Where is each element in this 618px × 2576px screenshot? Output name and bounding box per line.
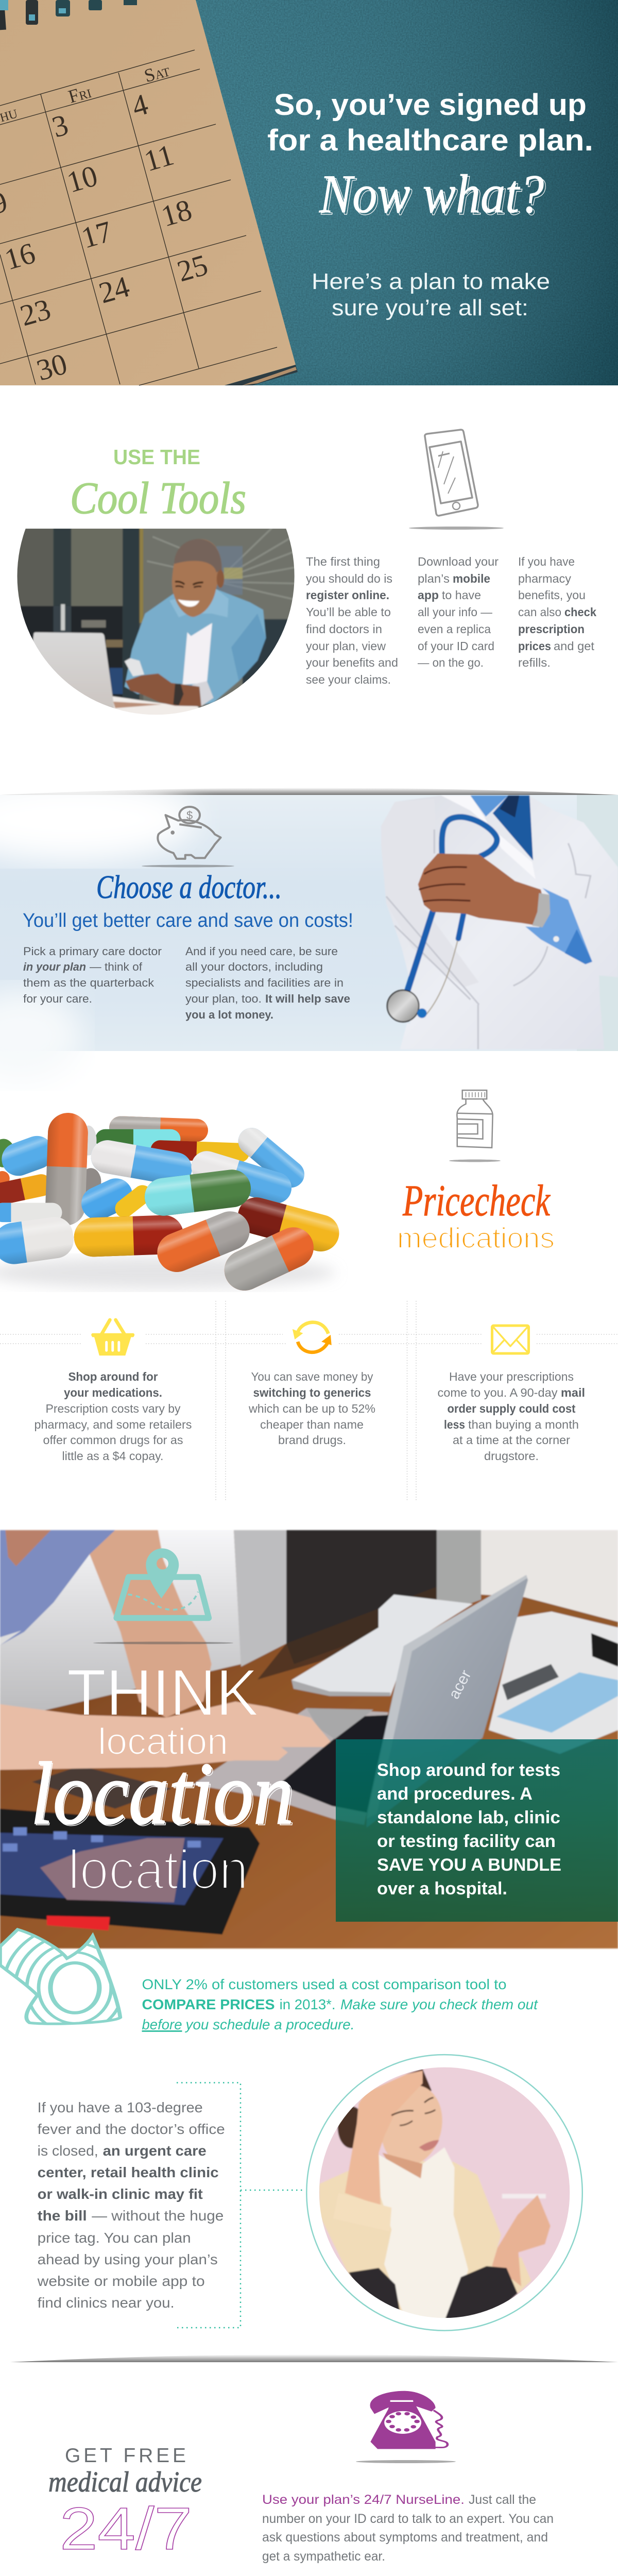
text: mobile app: Download your <box>418 555 499 568</box>
calendar photo: 23 <box>16 292 54 332</box>
headline: So, you’ve signed up <box>274 88 587 122</box>
text: mobile app <box>418 555 499 669</box>
text: register online: your benefits and <box>306 656 398 669</box>
headline <box>267 88 593 157</box>
text: pharmacy benefits: can also <box>518 605 561 619</box>
text: mobile app: app <box>418 588 439 602</box>
photo: sick woman with thermometer <box>304 2050 589 2335</box>
text: primary care doctor: — think of <box>90 960 143 973</box>
text: shop around: Prescription costs vary by <box>45 1402 181 1415</box>
text: mobile app: plan’s <box>418 572 450 585</box>
calendar photo: 18 <box>158 193 195 233</box>
heading: location script: location <box>31 1745 294 1843</box>
text: urgent care: an urgent care <box>103 2143 207 2159</box>
text: doctors in plan: It will help save <box>265 992 350 1005</box>
text: mail order supply: mail <box>561 1386 585 1399</box>
icon: medicine bottle <box>457 1090 493 1148</box>
calendar photo: 25 <box>174 248 211 288</box>
icon: piggy bank <box>158 807 221 859</box>
text: urgent care: center, retail health clinic <box>38 2164 219 2180</box>
dotted bracket <box>177 2082 303 2328</box>
heading: location first: location <box>98 1721 228 1762</box>
text: shop around: offer common drugs for as <box>43 1433 183 1447</box>
calendar photo: 17 <box>78 214 115 255</box>
text: mobile app: to have <box>442 588 481 602</box>
text: urgent care <box>37 2099 225 2311</box>
acer wordmark: acer <box>445 1667 475 1702</box>
icon: rotary telephone <box>370 2391 448 2449</box>
icon: envelope <box>492 1326 528 1353</box>
photo: man with laptop and phone <box>17 529 295 715</box>
icon shadow <box>409 527 504 530</box>
text: nurseline: Use your plan’s 24/7 NurseLine. <box>262 2493 465 2507</box>
script heading: choose a doctor: Choose a doctor... <box>96 869 282 905</box>
dollar sign on coin: $ <box>186 809 193 822</box>
icon: shopping basket <box>91 1320 134 1355</box>
text: nurseline <box>262 2493 554 2564</box>
text: only 2 percent: Make sure you check them out <box>340 1996 538 2012</box>
text: pharmacy benefits: refills. <box>518 656 551 669</box>
calendar photo: 3 <box>48 108 72 144</box>
text: nurseline: get a sympathetic ear. <box>262 2549 385 2564</box>
text: primary care doctor: them as the quarterback <box>23 976 154 989</box>
text: urgent care: the bill <box>38 2208 87 2224</box>
panel: think location <box>0 1530 618 1948</box>
text: pharmacy benefits: prices <box>518 639 551 653</box>
callout: green panel: or testing facility can <box>377 1832 556 1851</box>
callout: green panel: Shop around for tests <box>377 1760 560 1780</box>
text: mobile app: — on the go. <box>418 656 484 669</box>
icon shadow <box>142 865 234 868</box>
text: pharmacy benefits <box>518 555 596 669</box>
text: pharmacy benefits: check <box>564 605 596 619</box>
text: switching to generics: switching to generics <box>253 1386 371 1399</box>
icon shadow <box>449 1159 501 1162</box>
text: mail order supply: drugstore. <box>484 1449 539 1463</box>
text: shop around: pharmacy, and some retailers <box>34 1418 192 1431</box>
text: register online: your plan, view <box>306 639 386 653</box>
subheading: You’ll get better care and save on costs! <box>23 910 353 931</box>
calendar photo: 16 <box>1 236 39 276</box>
script heading: now what: Now what? <box>321 166 546 226</box>
text: only 2 percent: COMPARE PRICES <box>142 1996 275 2012</box>
text: register online <box>306 555 398 686</box>
calendar photo: 4 <box>128 87 152 123</box>
heading: get free: GET FREE <box>65 2445 186 2467</box>
text: urgent care: ahead by using your plan’s <box>38 2251 218 2267</box>
text: mail order supply <box>438 1370 585 1463</box>
text: switching to generics <box>248 1370 375 1447</box>
text: primary care doctor <box>23 945 162 1005</box>
text: only 2 percent <box>142 1976 538 2032</box>
text: register online: find doctors in <box>306 622 382 636</box>
text: shop around <box>34 1370 192 1463</box>
text: urgent care: price tag. You can plan <box>38 2230 191 2246</box>
text: register online: see your claims. <box>306 673 391 686</box>
calendar photo: SAT <box>142 59 172 86</box>
text: only 2 percent: before <box>142 2016 182 2032</box>
panel: cool tools <box>10 430 596 732</box>
text: doctors in plan: your plan, too. <box>185 992 262 1005</box>
text: primary care doctor: in your plan <box>23 960 86 973</box>
text: register online: You’ll be able to <box>306 605 391 619</box>
photo: doctor with stethoscope <box>381 795 618 1049</box>
text: doctors in plan: And if you need care, be sure <box>185 945 338 958</box>
text: mobile app: all your info — <box>418 605 492 619</box>
text: nurseline: number on your ID card to talk to an expert. You can <box>262 2512 554 2526</box>
text: mail order supply: at a time at the corner <box>453 1433 570 1447</box>
heading: location script: location <box>32 1747 296 1844</box>
heading: medications: medications <box>397 1222 555 1254</box>
panel: choose a doctor <box>0 778 618 1082</box>
callout: green panel: standalone lab, clinic <box>377 1808 560 1827</box>
text: mail order supply: come to you. A 90-day <box>438 1386 558 1399</box>
text: urgent care: is closed, <box>38 2143 98 2159</box>
calendar photo <box>0 0 298 387</box>
text: switching to generics: which can be up to 52% <box>248 1402 375 1415</box>
text: urgent care: If you have a 103-degree <box>38 2099 203 2115</box>
dotted grid <box>0 1301 618 1501</box>
text: pharmacy benefits: pharmacy <box>518 572 572 585</box>
intro text: Here’s a plan to make <box>312 269 550 294</box>
text: shop around: your medications. <box>64 1386 162 1399</box>
text: pharmacy benefits: If you have <box>518 555 575 568</box>
panel: pricecheck medications <box>0 1090 618 1501</box>
callout: green panel: and procedures. A <box>377 1784 533 1804</box>
text: nurseline: ask questions about symptoms and treatment, and <box>262 2530 548 2545</box>
text: pharmacy benefits: prescription <box>518 622 585 636</box>
text: mobile app: even a replica <box>418 622 491 636</box>
panel: hero <box>0 0 618 387</box>
heading: location thin: location <box>68 1838 248 1901</box>
icon shadow <box>93 1641 233 1645</box>
callout: green panel <box>336 1739 618 1922</box>
heading: use the cool tools <box>70 445 246 523</box>
text: urgent care: website or mobile app to <box>37 2273 205 2289</box>
text: shop around: Shop around for <box>68 1370 158 1383</box>
calendar photo: 11 <box>141 138 177 178</box>
headline: for a healthcare plan. <box>267 124 593 157</box>
text: doctors in plan: specialists and facilities are in <box>185 976 344 989</box>
icon: smartphone <box>425 430 478 516</box>
text: switching to generics: You can save money by <box>251 1370 373 1383</box>
text: only 2 percent: you schedule a procedure. <box>185 2016 354 2032</box>
text: only 2 percent: ONLY 2% of customers used a cost comparison tool to <box>142 1976 507 1992</box>
heading: 24/7: 24/7 <box>60 2495 192 2562</box>
text: pharmacy benefits: and get <box>554 639 595 653</box>
text: doctors in plan <box>185 945 350 1021</box>
icon: map pin <box>116 1548 209 1618</box>
text: register online: register online. <box>306 588 389 602</box>
text: mobile app: of your ID card <box>418 639 494 653</box>
text: primary care doctor: for your care. <box>23 992 92 1005</box>
icon: price tag <box>0 1928 123 2025</box>
photo: desk with laptop and tablet <box>0 1530 618 1948</box>
text: urgent care: find clinics near you. <box>38 2295 175 2311</box>
text: register online: you should do is <box>306 572 392 585</box>
text: pharmacy benefits: benefits, you <box>518 588 586 602</box>
text: nurseline: Just call the <box>469 2493 536 2507</box>
callout: green panel: SAVE YOU A BUNDLE <box>377 1855 561 1875</box>
text: register online: The first thing <box>306 555 380 568</box>
text: shop around: little as a $4 copay. <box>62 1449 164 1463</box>
text: mail order supply: than buying a month <box>468 1418 579 1431</box>
text: only 2 percent: in 2013*. <box>280 1996 336 2012</box>
text: doctors in plan: all your doctors, including <box>185 960 323 973</box>
calendar photo: 30 <box>33 347 71 387</box>
intro text <box>312 269 550 320</box>
text: switching to generics: cheaper than name <box>260 1418 364 1431</box>
calendar photo: 24 <box>95 269 133 310</box>
text: urgent care: or walk-in clinic may fit <box>38 2186 203 2202</box>
calendar photo: 10 <box>63 159 101 199</box>
text: mail order supply: less <box>444 1418 465 1431</box>
heading: use the cool tools: USE THE <box>113 445 200 469</box>
intro text: sure you’re all set: <box>332 295 528 320</box>
text: primary care doctor: Pick a primary care doctor <box>23 945 162 958</box>
section divider <box>10 2354 618 2362</box>
text: switching to generics: brand drugs. <box>278 1433 346 1447</box>
icon shadow <box>356 2460 456 2463</box>
callout: green panel: over a hospital. <box>377 1879 507 1899</box>
heading: pricecheck: Pricecheck <box>402 1176 551 1225</box>
icon: refresh arrows <box>293 1323 332 1352</box>
heading: use the cool tools: Cool Tools <box>70 473 246 523</box>
panel: nurseline <box>48 2391 593 2576</box>
photo: pile of capsules <box>0 1112 344 1297</box>
text: urgent care: — without the huge <box>92 2208 224 2224</box>
heading: medical advice: medical advice <box>48 2466 202 2498</box>
text: mobile app: mobile <box>453 572 490 585</box>
calendar photo: FRI <box>66 81 93 107</box>
text: mail order supply: Have your prescriptions <box>449 1370 574 1383</box>
text: urgent care: fever and the doctor’s office <box>38 2121 225 2137</box>
heading: think: THINK <box>67 1656 259 1729</box>
text: doctors in plan: you a lot money. <box>185 1008 273 1021</box>
text: mail order supply: order supply could cost <box>447 1402 576 1415</box>
script heading: now what: Now what? <box>319 164 544 224</box>
